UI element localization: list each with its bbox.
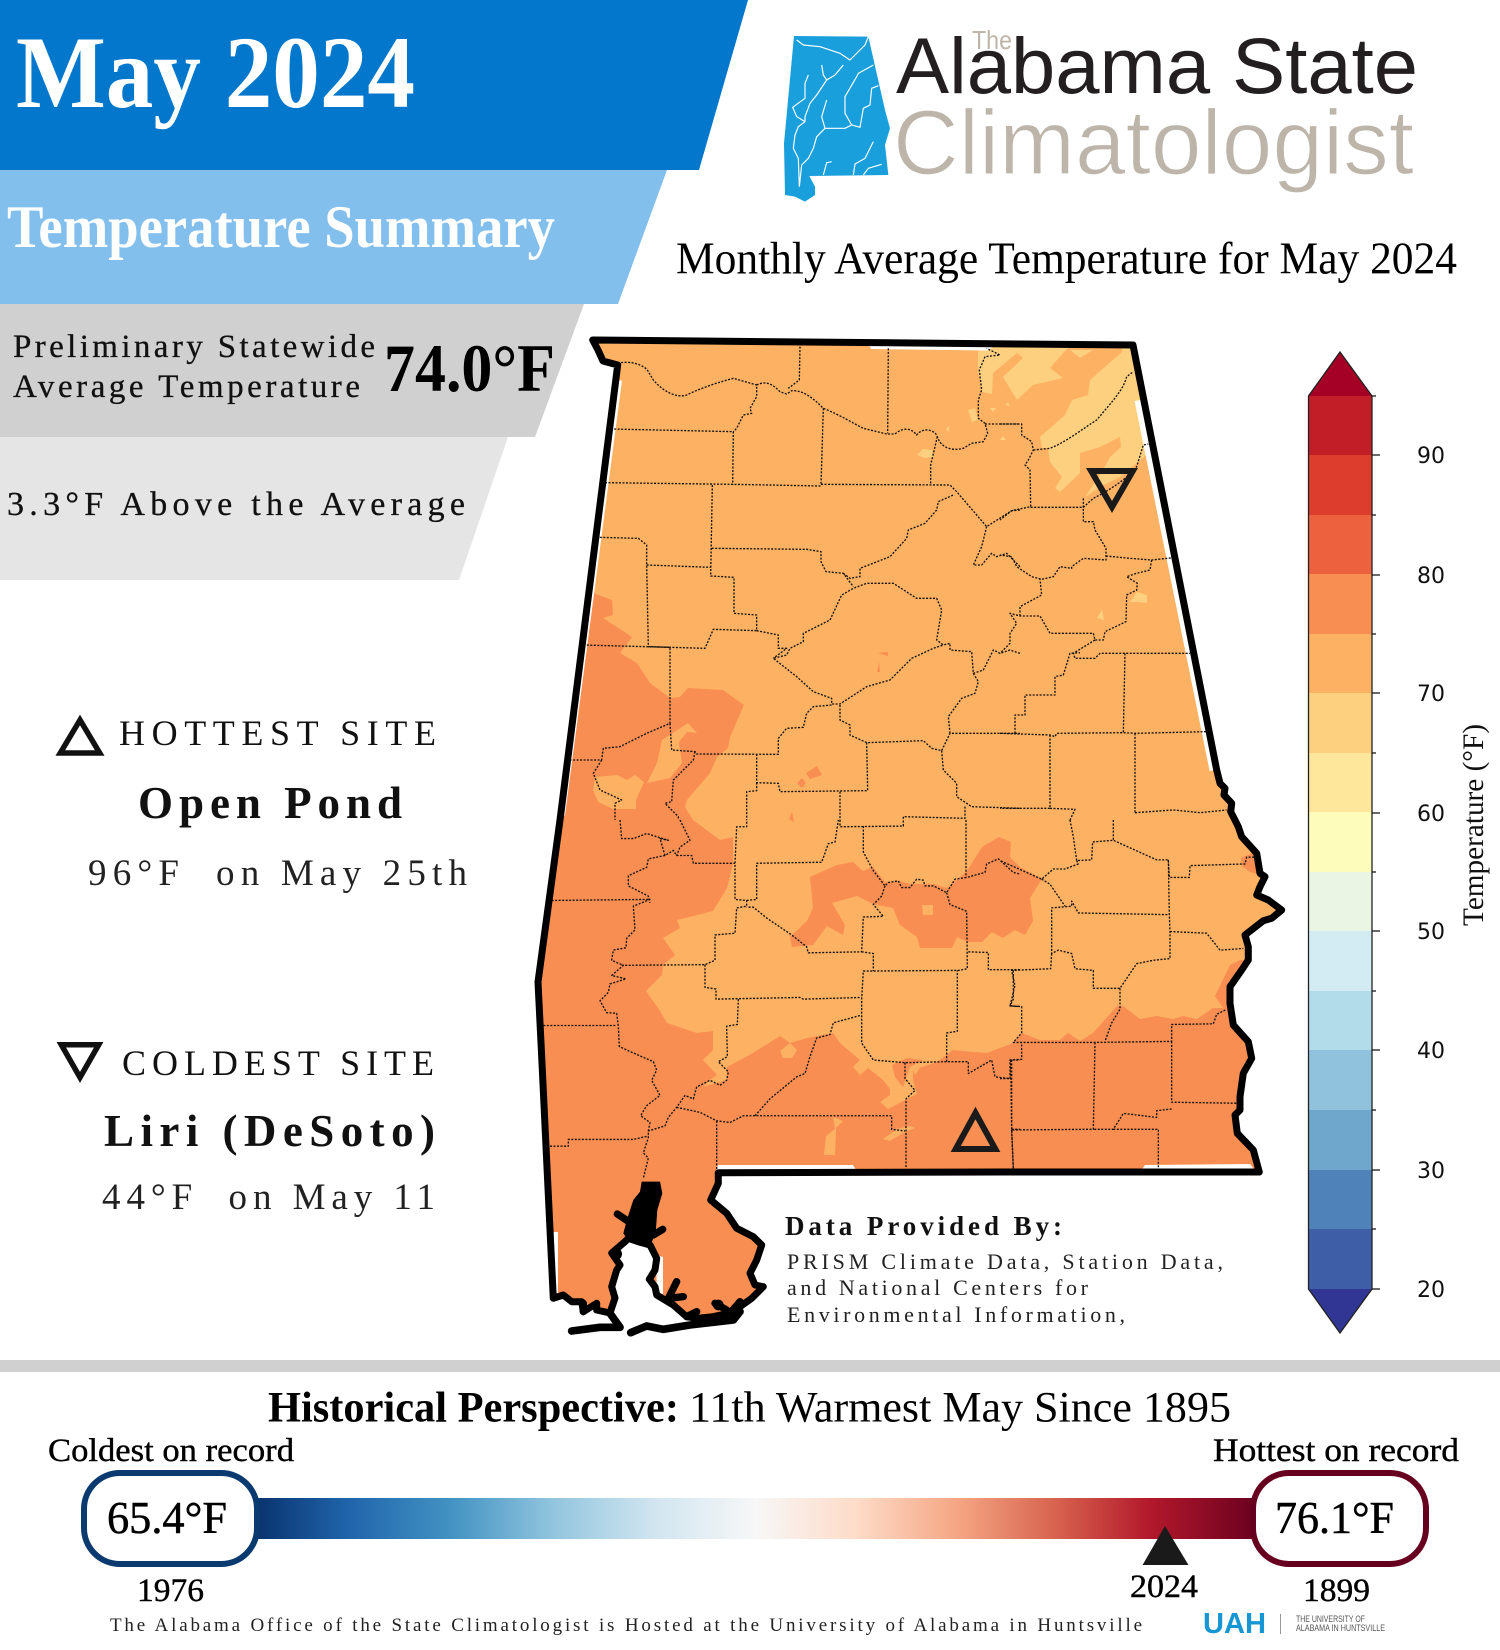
text: hottest site name: Open Pond	[138, 778, 402, 828]
panel: historical perspective	[48, 1384, 1460, 1609]
map: cooler temperature zones	[917, 345, 1150, 620]
title: May 2024: May 2024	[16, 16, 415, 130]
logo: University of Alabama in Huntsville: ALABAMA IN HUNTSVILLE	[1296, 1623, 1385, 1634]
text: hottest value: 96°F on May 25th	[88, 853, 468, 894]
text: source line 1: PRISM Climate Data, Station Data,	[787, 1249, 1223, 1274]
map: state outline	[538, 340, 1282, 1333]
colour bands	[1308, 352, 1372, 1333]
tick labels: 30	[1417, 1159, 1445, 1184]
tick labels: 90	[1417, 444, 1445, 469]
text: Climatologist: Climatologist	[893, 92, 1414, 194]
tick labels: 50	[1417, 920, 1445, 945]
gradient scale bar	[250, 1498, 1262, 1539]
text: 1976: 1976	[137, 1573, 204, 1609]
text: statewide average label line 2: Average Temperature	[13, 369, 360, 405]
icon: coldest site marker	[1091, 471, 1133, 507]
pill: hottest value: 76.1°F	[1275, 1493, 1394, 1543]
pill: coldest value: 65.4°F	[107, 1493, 227, 1543]
tick labels: 60	[1417, 802, 1445, 827]
text: hottest on record: Hottest on record	[1213, 1433, 1460, 1469]
panel: hottest site	[60, 713, 468, 894]
text: 1899: 1899	[1303, 1573, 1370, 1609]
panel: statewide average	[0, 304, 584, 437]
text: coldest site label: COLDEST SITE	[122, 1043, 434, 1083]
panel: departure from average	[0, 437, 508, 580]
tick labels: 80	[1417, 564, 1445, 589]
marker: 2024 position	[1143, 1526, 1188, 1565]
map: Mobile Bay and Gulf coast detail	[572, 1182, 740, 1333]
map: base colour islands inside warm zones	[593, 723, 933, 1155]
footer text: The Alabama Office of the State Climatologist is Hosted at the University of Alabama in Huntsville	[110, 1615, 1142, 1636]
text: source line 3: Environmental Information,	[787, 1302, 1125, 1327]
pill: hottest value	[1253, 1473, 1426, 1564]
text: statewide average label: Preliminary Statewide	[13, 329, 375, 365]
icon: up triangle	[60, 720, 100, 753]
logo: University of Alabama in Huntsville	[1203, 1608, 1385, 1640]
tick labels	[1417, 444, 1445, 1303]
text: The: The	[972, 25, 1012, 55]
map: county boundaries	[543, 347, 1257, 1178]
pill: coldest value	[84, 1473, 257, 1564]
tick labels: 70	[1417, 682, 1445, 707]
text: 2024: 2024	[1130, 1569, 1198, 1605]
map: warmer temperature zones	[542, 594, 1256, 1314]
value: statewide average: 74.0°F	[384, 330, 555, 406]
heading: map title: Monthly Average Temperature for May 2024	[676, 234, 1457, 284]
icon: down triangle	[61, 1045, 99, 1078]
logo: University of Alabama in Huntsville: THE UNIVERSITY OF	[1296, 1614, 1365, 1625]
tick labels: 20	[1417, 1278, 1445, 1303]
text: ranking: 11th Warmest May Since 1895	[689, 1384, 1231, 1432]
map base fill	[594, 344, 1276, 1109]
map: unfilled edge gaps	[552, 343, 1256, 1295]
panel: coldest site	[61, 1043, 435, 1218]
heading: temperature summary: Temperature Summary	[7, 194, 555, 260]
text block: data sources	[785, 1211, 1223, 1327]
text: Alabama State: Alabama State	[896, 21, 1418, 110]
divider bar	[0, 1360, 1500, 1372]
text: coldest on record: Coldest on record	[48, 1433, 295, 1469]
text: coldest site name: Liri (DeSoto)	[104, 1106, 435, 1156]
text: departure: 3.3°F Above the Average	[7, 486, 465, 523]
icon: hottest site marker	[956, 1113, 995, 1149]
map: Alabama monthly average temperature	[534, 336, 1286, 1336]
panel: month banner	[0, 0, 748, 170]
logo: Alabama State Climatologist	[784, 21, 1418, 202]
tick labels: 40	[1417, 1039, 1445, 1064]
axis label: Temperature (°F)	[1457, 724, 1490, 926]
logo: University of Alabama in Huntsville: UAH	[1203, 1608, 1266, 1640]
text: source line 2: and National Centers for	[787, 1275, 1089, 1300]
text: hottest site label: HOTTEST SITE	[119, 713, 436, 753]
heading: data provided by: Data Provided By:	[785, 1211, 1062, 1241]
chart: temperature colour bar	[1308, 352, 1490, 1333]
icon: Alabama state with rivers	[784, 36, 890, 202]
heading: historical perspective: Historical Perspective:	[268, 1384, 679, 1432]
text: coldest value: 44°F on May 11	[102, 1177, 435, 1218]
panel: temperature summary banner	[0, 170, 667, 304]
